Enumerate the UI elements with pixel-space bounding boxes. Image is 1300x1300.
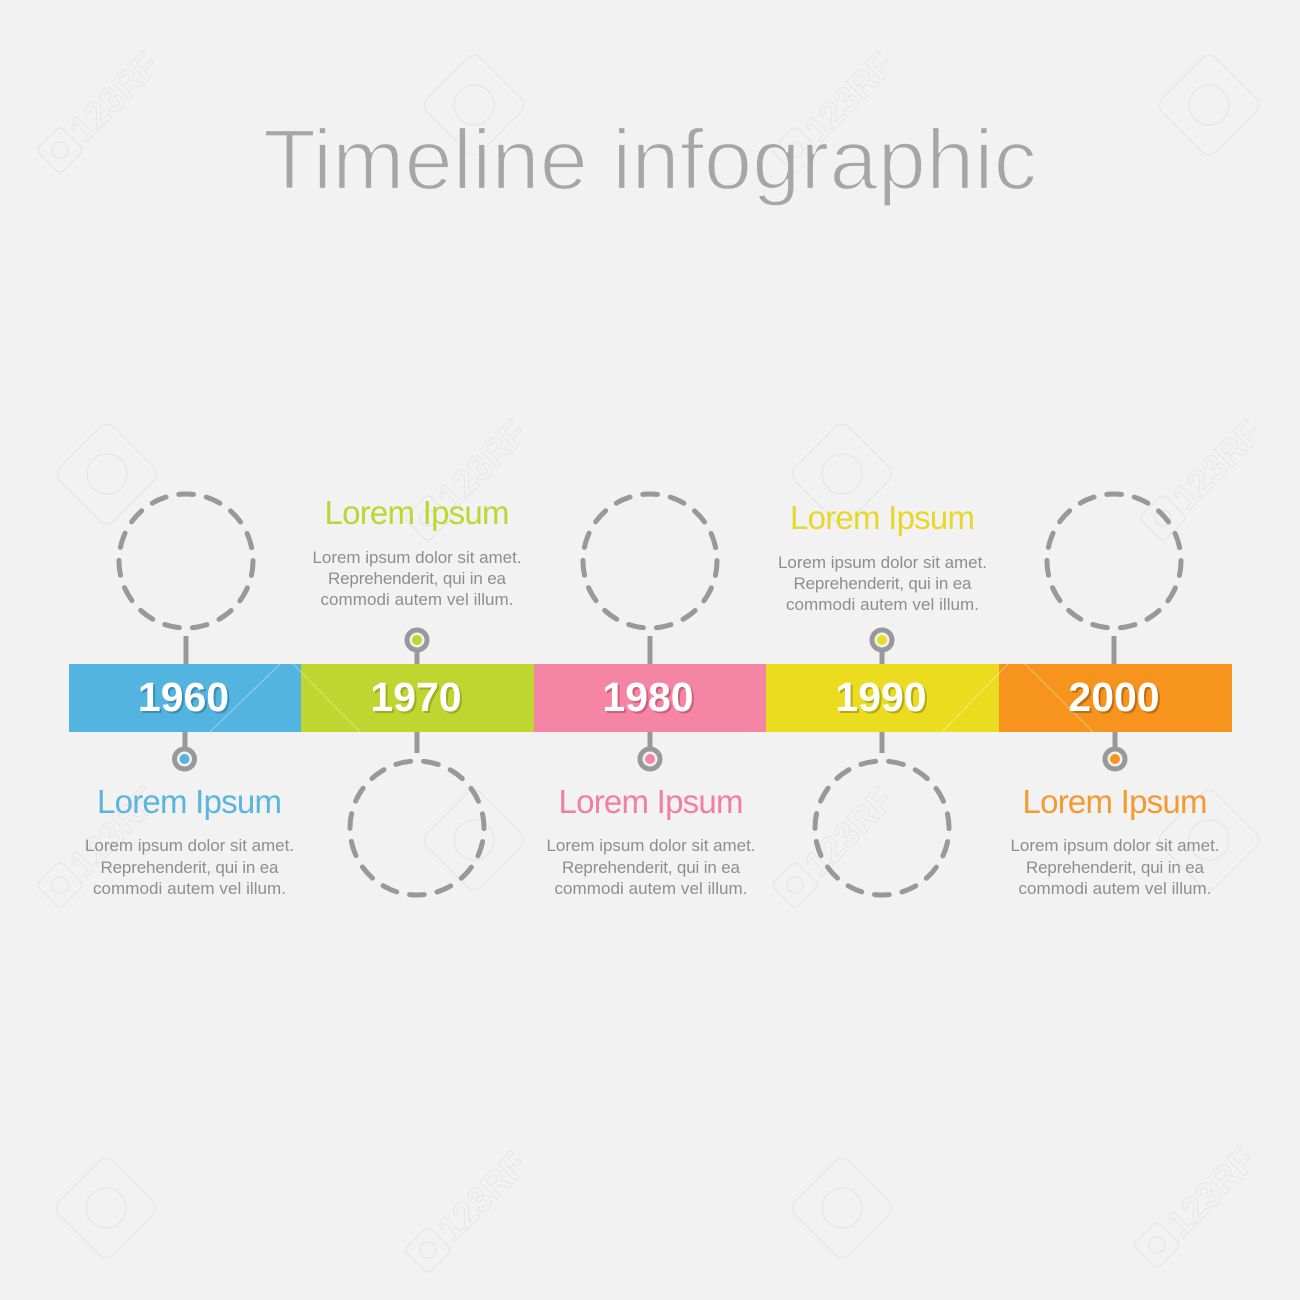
faint diagonal watermark lines (210, 664, 1093, 732)
segment 1990: 1990 (837, 676, 929, 722)
watermark pattern: 123RF (429, 1144, 535, 1249)
text block 2000: Lorem Ipsum (1022, 783, 1208, 820)
text block 1970 (312, 494, 522, 609)
text block 1980: Reprehenderit, qui in ea (562, 858, 741, 877)
title: Timeline infographic (263, 113, 1037, 208)
segment 1980: 1980 (604, 676, 696, 722)
dashed circle 1990 (815, 761, 949, 895)
text block 1960 (85, 783, 294, 898)
text block 1990 (778, 499, 987, 614)
watermark pattern: 123RF (796, 779, 902, 884)
text block 1970: Reprehenderit, qui in ea (328, 569, 507, 588)
segment 1970: 1970 (370, 674, 462, 720)
dashed circle 2000 (1047, 494, 1181, 628)
segment 1960: 1960 (138, 674, 229, 720)
connector stems (185, 636, 1115, 755)
timeline bar (69, 664, 1232, 732)
watermark pattern: 123RF (1158, 1139, 1264, 1244)
text block 1990: Lorem ipsum dolor sit amet. (778, 553, 987, 572)
segment 2000 (999, 664, 1232, 732)
watermark pattern: 123RF (61, 44, 167, 149)
text block 1960: Lorem ipsum dolor sit amet. (85, 836, 294, 855)
dashed circle 1960 (119, 494, 253, 628)
marker 1970 (407, 630, 427, 650)
watermark pattern: 123RF (61, 779, 167, 884)
text block 2000: Lorem ipsum dolor sit amet. (1010, 836, 1220, 855)
watermark pattern: 123RF (429, 412, 535, 517)
marker 1990 (872, 630, 892, 650)
segment 1980: 1980 (602, 674, 694, 720)
text block 2000 (1010, 783, 1220, 898)
marker 2000 (1105, 749, 1125, 769)
text block 1960: Reprehenderit, qui in ea (100, 858, 279, 877)
segment 1990: 1990 (835, 674, 927, 720)
segment 1990 (766, 664, 999, 732)
segment 2000: 2000 (1068, 674, 1160, 720)
segment 1980 (534, 664, 766, 732)
text block 1980 (546, 783, 756, 898)
text block 2000: commodi autem vel illum. (1018, 879, 1212, 898)
marker 1980 (640, 749, 660, 769)
text block 1960: Lorem Ipsum (97, 783, 282, 820)
watermark pattern: 123RF (796, 44, 902, 149)
text block 1980: Lorem ipsum dolor sit amet. (546, 836, 756, 855)
watermark pattern: 123RF (1164, 412, 1270, 517)
dashed circle 1980 (583, 494, 717, 628)
text block 1990: Reprehenderit, qui in ea (794, 574, 972, 593)
text block 1980: commodi autem vel illum. (554, 879, 748, 898)
segment 1960: 1960 (140, 676, 231, 722)
dashed circle 1970 (350, 761, 484, 895)
text block 1970: Lorem ipsum dolor sit amet. (312, 548, 522, 567)
text block 1980: Lorem Ipsum (558, 783, 744, 820)
segment 1970 (301, 664, 534, 732)
marker 1960 (174, 749, 194, 769)
segment 1970: 1970 (372, 676, 464, 722)
segment 1960 (69, 664, 301, 732)
text block 1960: commodi autem vel illum. (93, 879, 286, 898)
text block 1990: commodi autem vel illum. (786, 595, 979, 614)
text block 2000: Reprehenderit, qui in ea (1026, 858, 1205, 877)
text block 1970: commodi autem vel illum. (320, 590, 514, 609)
segment 2000: 2000 (1070, 676, 1162, 722)
text block 1970: Lorem Ipsum (324, 494, 510, 531)
text block 1990: Lorem Ipsum (790, 499, 975, 536)
